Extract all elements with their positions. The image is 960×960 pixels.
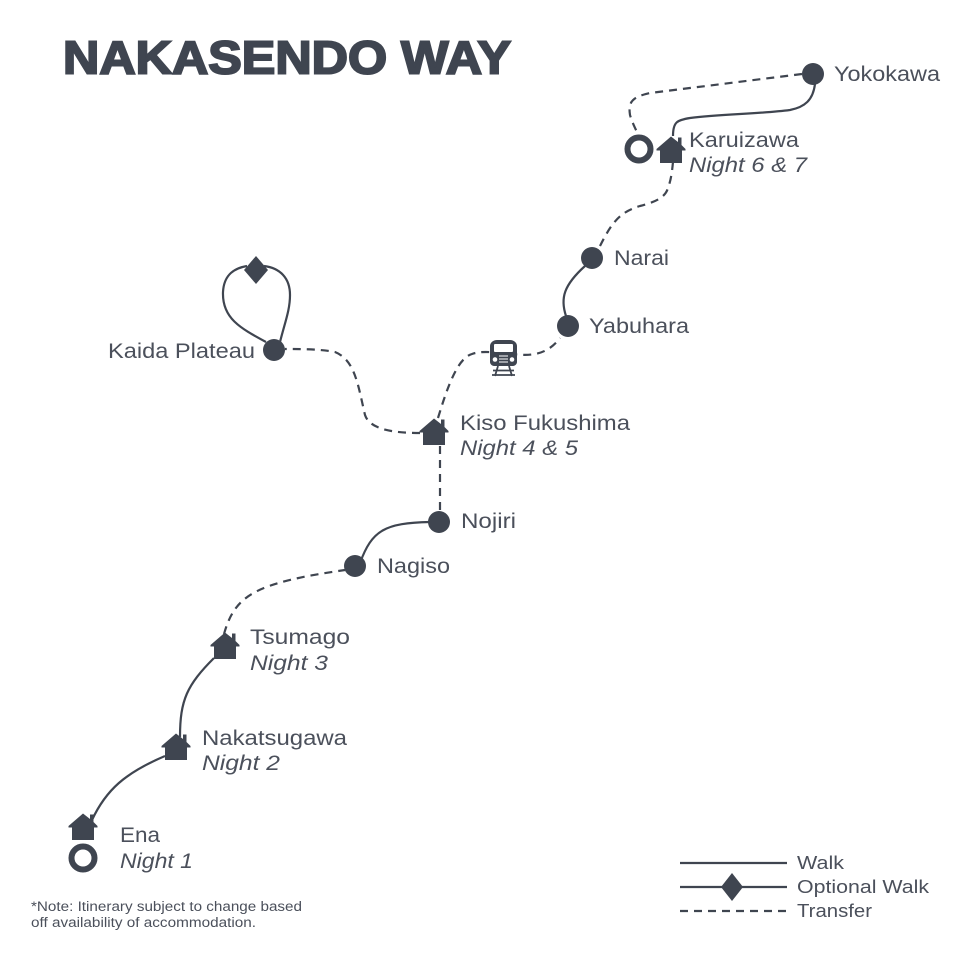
stop: Yokokawa: Yokokawa [834, 63, 940, 86]
stop: Kiso Fukushima: Night 4 & 5 [460, 437, 578, 460]
stop: Karuizawa: Karuizawa [689, 129, 799, 152]
stop: Yabuhara [557, 315, 689, 338]
stop: Ena: Ena [120, 824, 160, 847]
stop: Yabuhara: Yabuhara [589, 315, 689, 338]
route: optional walk loop at Kaida Plateau [223, 266, 290, 342]
stop: Kiso Fukushima [420, 412, 630, 460]
stop: Narai: Narai [614, 247, 669, 270]
stop: Karuizawa: Night 6 & 7 [689, 154, 808, 177]
stop: Narai [581, 247, 669, 270]
title: NAKASENDO WAY [63, 32, 511, 84]
stop: Tsumago [210, 626, 350, 675]
stop: Tsumago: Night 3 [250, 652, 328, 675]
route: walk Yabuhara to Narai [563, 266, 585, 316]
legend: optional walk: Optional Walk [797, 876, 930, 897]
stop: Nagiso [344, 555, 450, 578]
train icon [490, 339, 517, 376]
stop: Nakatsugawa [162, 727, 347, 775]
stop: Nakatsugawa: Nakatsugawa [202, 727, 347, 750]
route: walk Nakatsugawa to Tsumago [180, 658, 214, 737]
route: walk Ena to Nakatsugawa [92, 756, 165, 820]
stop: Nakatsugawa: Night 2 [202, 752, 280, 775]
legend: optional walk [680, 873, 930, 901]
footnote [31, 899, 302, 930]
stop: Nagiso: Nagiso [377, 555, 450, 578]
route: transfer Kiso Fukushima to train and Yabuhara [438, 338, 560, 418]
stop: Nojiri [428, 510, 516, 533]
route: transfer Nojiri to Kiso Fukushima [439, 445, 441, 510]
legend: walk: Walk [797, 852, 845, 873]
stop: Kiso Fukushima: Kiso Fukushima [460, 412, 630, 435]
stop: Ena: Night 1 [120, 850, 193, 873]
stop: Tsumago: Tsumago [250, 626, 350, 649]
route: transfer Yokokawa to Karuizawa start [630, 74, 802, 134]
route: transfer Narai to Karuizawa [600, 162, 673, 246]
icon: optional walk diamond [244, 256, 268, 284]
route: walk Karuizawa to Yokokawa [673, 84, 815, 136]
stop: Kaida Plateau: Kaida Plateau [108, 340, 255, 363]
stop: Nojiri: Nojiri [461, 510, 516, 533]
legend [680, 852, 930, 921]
stop: Ena [68, 814, 193, 873]
route: transfer Kiso Fukushima to Kaida Plateau [285, 349, 420, 433]
legend: transfer: Transfer [797, 900, 872, 921]
footnote: *Note: Itinerary subject to change based [31, 899, 302, 914]
stop: Yokokawa [802, 63, 940, 86]
route: transfer Tsumago to Nagiso [224, 570, 345, 634]
route: walk Nagiso to Nojiri [360, 522, 430, 563]
stop: Karuizawa [628, 129, 808, 177]
footnote: off availability of accommodation. [31, 915, 256, 930]
